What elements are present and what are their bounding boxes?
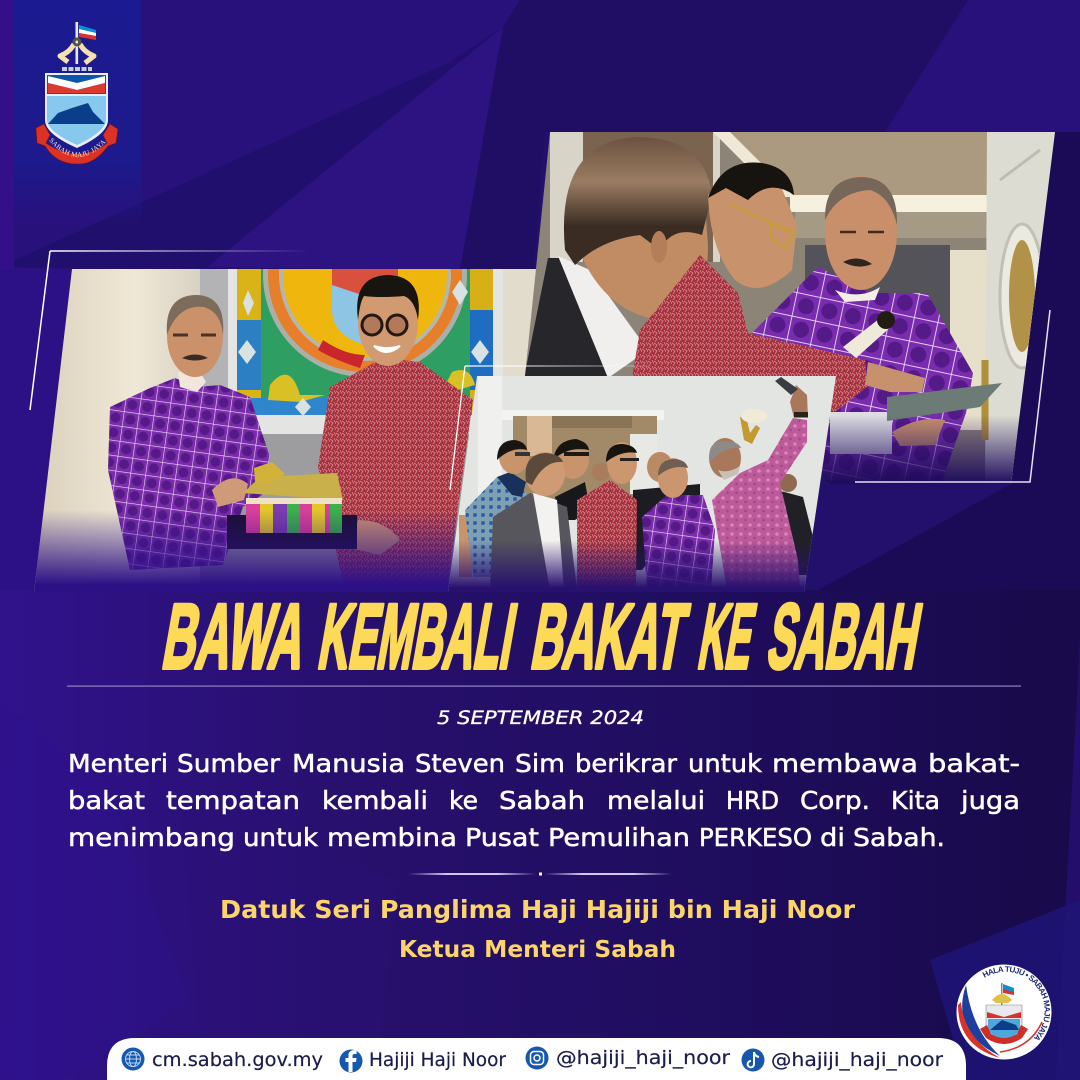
person: Hajiji in purple shirt [642, 458, 715, 590]
body paragraph: Kita [891, 786, 940, 815]
stained glass window [237, 269, 493, 416]
photo frame line: right [855, 310, 1050, 482]
background men [592, 452, 700, 570]
body paragraph: untuk [688, 749, 763, 778]
body paragraph [68, 749, 1020, 852]
title: BAWA [157, 585, 315, 688]
body paragraph: Sabah [499, 786, 585, 815]
body paragraph: Pemulihan [548, 823, 690, 852]
icon: tiktok [742, 1048, 764, 1072]
body paragraph: kembali [322, 786, 428, 815]
doorway [513, 416, 657, 500]
body paragraph: Sabah. [853, 823, 945, 852]
title [157, 585, 929, 688]
person: Hajiji in purple shirt [748, 176, 973, 484]
icon: mini coat of arms [980, 983, 1028, 1044]
emblem: Sabah coat of arms [36, 22, 118, 164]
body paragraph: Manusia [292, 749, 405, 778]
icon: instagram [526, 1046, 548, 1070]
signatory title: Ketua Menteri Sabah [399, 937, 676, 963]
facebook name: Hajiji Haji Noor [369, 1049, 506, 1071]
title: KE [693, 585, 763, 688]
folder [830, 383, 1002, 454]
body paragraph: membawa [772, 749, 918, 778]
ornamental divider [408, 872, 672, 876]
person: man taking selfie in pink shirt [709, 377, 808, 590]
title: KEMBALI [313, 585, 524, 688]
footer contact bar [107, 1038, 966, 1080]
signatory name: Datuk Seri Panglima Haji Hajiji bin Haji Noor [220, 895, 856, 924]
body paragraph: ke [449, 786, 478, 815]
body paragraph: Corp. [800, 786, 870, 815]
photo: minister handing gift to chief minister [34, 269, 536, 592]
fade to background [448, 542, 810, 592]
photo frame line: centre [450, 366, 650, 490]
person: Hajiji in purple shirt [108, 295, 270, 570]
icon: shield [45, 73, 108, 148]
seal: Hala Tuju Sabah Maju Jaya [956, 964, 1052, 1060]
body paragraph: bakat [68, 786, 145, 815]
icon: motto ribbon: SABAH MAJU JAYA [50, 138, 106, 158]
body paragraph: Pusat [465, 823, 539, 852]
title: BAKAT [526, 585, 695, 688]
person: man at right in black [777, 474, 813, 575]
person: man in blue batik [459, 440, 530, 577]
body paragraph: juga [960, 786, 1020, 815]
person: man in grey suit [490, 452, 577, 590]
divider under title [67, 686, 1021, 687]
tiktok handle: @hajiji_haji_noor [771, 1049, 943, 1071]
fade to background [820, 418, 1019, 484]
photo: group selfie [440, 376, 840, 596]
person: man from behind in black suit [524, 137, 712, 378]
body paragraph: di [820, 823, 845, 852]
door with gold plaque [985, 132, 1056, 484]
icon: motto ribbon [36, 124, 118, 164]
person: red-shirted man with glasses [632, 162, 925, 412]
body paragraph: melalui [607, 786, 705, 815]
photo frame line: left [30, 251, 310, 410]
icon: crossed arms crest [60, 39, 94, 69]
top-left colour panel [14, 0, 141, 225]
person: man in black with glasses [553, 439, 590, 520]
icon: facebook [340, 1050, 362, 1072]
fade to background [34, 513, 458, 592]
body paragraph: Menteri [68, 749, 168, 778]
body paragraph: Sumber [177, 749, 281, 778]
gift box [227, 462, 357, 549]
wall [30, 269, 205, 594]
website: cm.sabah.gov.my [152, 1049, 323, 1071]
date: 5 SEPTEMBER 2024 [437, 707, 644, 729]
room walls [440, 376, 840, 596]
photo: chief minister viewing folder [520, 132, 1060, 487]
person: man in red shirt [577, 442, 639, 590]
body paragraph: menimbang [68, 823, 235, 852]
body paragraph: tempatan [166, 786, 300, 815]
icon: flag on pole [76, 22, 96, 64]
body paragraph: bakat- [928, 749, 1020, 778]
body paragraph: membina [327, 823, 457, 852]
icon: globe [122, 1048, 144, 1070]
body paragraph: PERKESO [699, 823, 812, 852]
wall lamp [740, 409, 767, 444]
body paragraph: HRD [726, 786, 779, 815]
body paragraph: Steven [415, 749, 505, 778]
person: Steven Sim in red shirt [318, 275, 473, 592]
body paragraph: berikrar [575, 749, 678, 778]
seal: Hala Tuju Sabah Maju Jaya: HALA TUJU • SABAH MAJU JAYA [982, 966, 1050, 1040]
body paragraph: untuk [243, 823, 319, 852]
room [520, 132, 1060, 487]
body paragraph: Sim [515, 749, 565, 778]
instagram handle: @hajiji_haji_noor [556, 1047, 730, 1069]
